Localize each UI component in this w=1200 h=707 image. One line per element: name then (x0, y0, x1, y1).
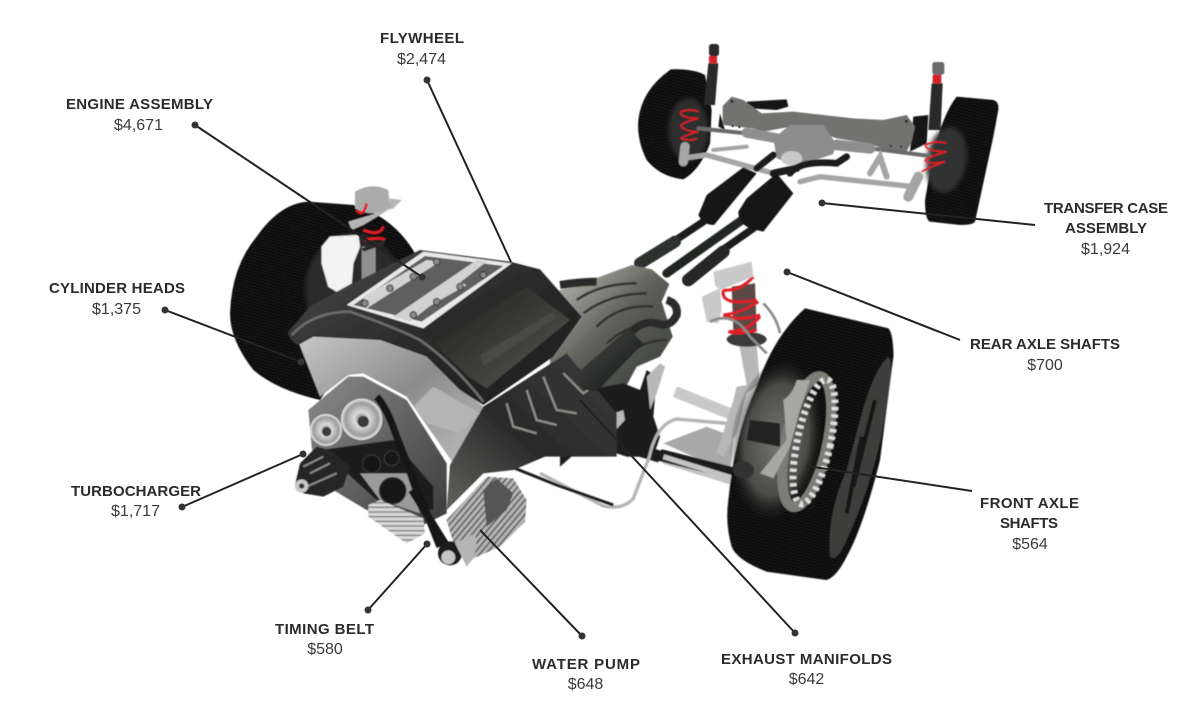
cover highlight (292, 312, 483, 402)
long exhaust muffler (575, 328, 643, 392)
label: rear axle shafts: $700 (1027, 357, 1063, 374)
right cooling fins (447, 477, 527, 558)
pulley left (310, 414, 342, 446)
lower control arm (663, 427, 733, 473)
engine front face (308, 377, 447, 527)
white reservoir (322, 235, 360, 292)
engine silver patch (360, 473, 420, 513)
bracket highlights (595, 363, 665, 440)
front left wheel (230, 202, 417, 400)
upper control arm (675, 392, 733, 415)
exhaust headers (507, 373, 593, 433)
differential flange (781, 151, 802, 166)
label: water pump: $648 (568, 676, 603, 693)
dark axle boot (747, 420, 780, 447)
lower control arms (682, 147, 918, 197)
dark lower accessory area (320, 440, 433, 510)
top of engine block (298, 335, 483, 463)
cover bolts (362, 258, 487, 318)
label: exhaust manifolds (721, 651, 892, 688)
label: flywheel: $2,474 (397, 51, 446, 68)
label: water pump: WATER PUMP (532, 656, 640, 673)
leader line: front axle shafts (807, 466, 972, 491)
black bracket (718, 99, 928, 152)
dark rod under engine (507, 465, 613, 505)
label: transfer case assembly: $1,924 (1081, 241, 1130, 258)
leader line: cylinder heads (162, 306, 304, 366)
leader line: flywheel (424, 76, 511, 262)
label: front axle shafts (980, 495, 1079, 553)
turbocharger (295, 447, 350, 497)
label: rear axle shafts: REAR AXLE SHAFTS (970, 336, 1120, 353)
leader line: water pump (480, 530, 586, 640)
label: turbocharger: TURBOCHARGER (71, 483, 201, 500)
crank housing (455, 533, 477, 567)
crank pulley (441, 550, 455, 564)
label: engine assembly (66, 96, 213, 134)
label: transfer case assembly: ASSEMBLY (1065, 220, 1147, 237)
label: rear axle shafts (970, 336, 1120, 374)
rear left wheel (638, 69, 712, 179)
exhaust crossover pipe (560, 282, 677, 333)
hub carrier (760, 380, 810, 478)
leader line: engine assembly (192, 122, 426, 280)
rim spoke shading (847, 400, 875, 513)
x-ray hub glow (721, 355, 832, 525)
label: cylinder heads (49, 280, 185, 318)
timing belt (377, 397, 453, 557)
hub shadow (305, 233, 402, 347)
valve rails (363, 260, 487, 322)
leader line: timing belt (364, 540, 430, 614)
cover glass ledge (480, 312, 555, 367)
ball joint (733, 461, 754, 479)
label: front axle shafts: SHAFTS (1000, 515, 1058, 532)
cover opening (353, 256, 503, 322)
engine cover (288, 250, 582, 405)
label: flywheel: FLYWHEEL (380, 30, 464, 47)
label: transfer case assembly: TRANSFER CASE (1044, 200, 1168, 217)
front right wheel (721, 308, 893, 580)
muffler one (698, 167, 757, 225)
transmission housing (550, 265, 673, 388)
engine right side (447, 353, 617, 510)
label: cylinder heads: CYLINDER HEADS (49, 280, 185, 297)
pulley right (341, 399, 382, 440)
label: water pump (532, 656, 640, 693)
underbody dark mass (560, 370, 660, 467)
front strut perch (727, 332, 767, 347)
damper body (732, 283, 757, 332)
rear right wheel (921, 97, 998, 225)
label: flywheel (380, 30, 464, 68)
lower cooling fins (368, 500, 425, 543)
exhaust mufflers and pipes (640, 155, 847, 280)
illustration: car drivetrain and suspension (230, 44, 998, 580)
label: timing belt: TIMING BELT (275, 621, 374, 638)
subframe bolts (731, 100, 908, 148)
strut top mount (702, 262, 753, 323)
leader line: rear axle shafts (784, 268, 960, 340)
front coil spring (723, 277, 760, 333)
label: timing belt: $580 (307, 641, 343, 658)
engine (230, 186, 617, 567)
transmission and front right corner (540, 262, 893, 580)
label: exhaust manifolds: $642 (789, 671, 824, 688)
label: exhaust manifolds: EXHAUST MANIFOLDS (721, 651, 892, 668)
label: timing belt (275, 621, 374, 658)
front left strut (348, 186, 402, 280)
crank pulley belt end (438, 541, 462, 565)
front strut (717, 345, 760, 457)
transmission ribs (577, 283, 667, 360)
stabilizer bar (540, 419, 727, 507)
rear half shafts (698, 128, 930, 156)
wheel rim (830, 357, 891, 558)
label: front axle shafts: FRONT AXLE (980, 495, 1079, 512)
steering rack boot (627, 447, 733, 473)
brake hose (710, 303, 780, 353)
cylinder cover lower (483, 478, 513, 527)
leader line: transfer case assembly (818, 200, 1035, 225)
leader line: exhaust manifolds (580, 400, 798, 636)
cover glass window (433, 287, 570, 388)
rear subframe (723, 97, 915, 152)
brake disc (773, 372, 841, 511)
rear coil springs (681, 110, 947, 172)
label: engine assembly: $4,671 (114, 117, 163, 134)
rear axle assembly (638, 44, 998, 280)
leader line: turbocharger (178, 450, 306, 510)
cover opening frame (347, 252, 512, 328)
label: transfer case assembly (1044, 200, 1168, 258)
label: front axle shafts: $564 (1012, 536, 1048, 553)
label: cylinder heads: $1,375 (92, 301, 141, 318)
muffler two (738, 173, 793, 232)
rear shock absorbers (704, 44, 944, 130)
accessory bracket (413, 387, 480, 433)
differential (773, 125, 836, 164)
label: turbocharger: $1,717 (111, 503, 160, 520)
lower arm tube (663, 460, 733, 482)
label: engine assembly: ENGINE ASSEMBLY (66, 96, 213, 113)
label: turbocharger (71, 483, 201, 520)
brake disc vents (785, 376, 843, 507)
small black pulleys (363, 451, 406, 504)
